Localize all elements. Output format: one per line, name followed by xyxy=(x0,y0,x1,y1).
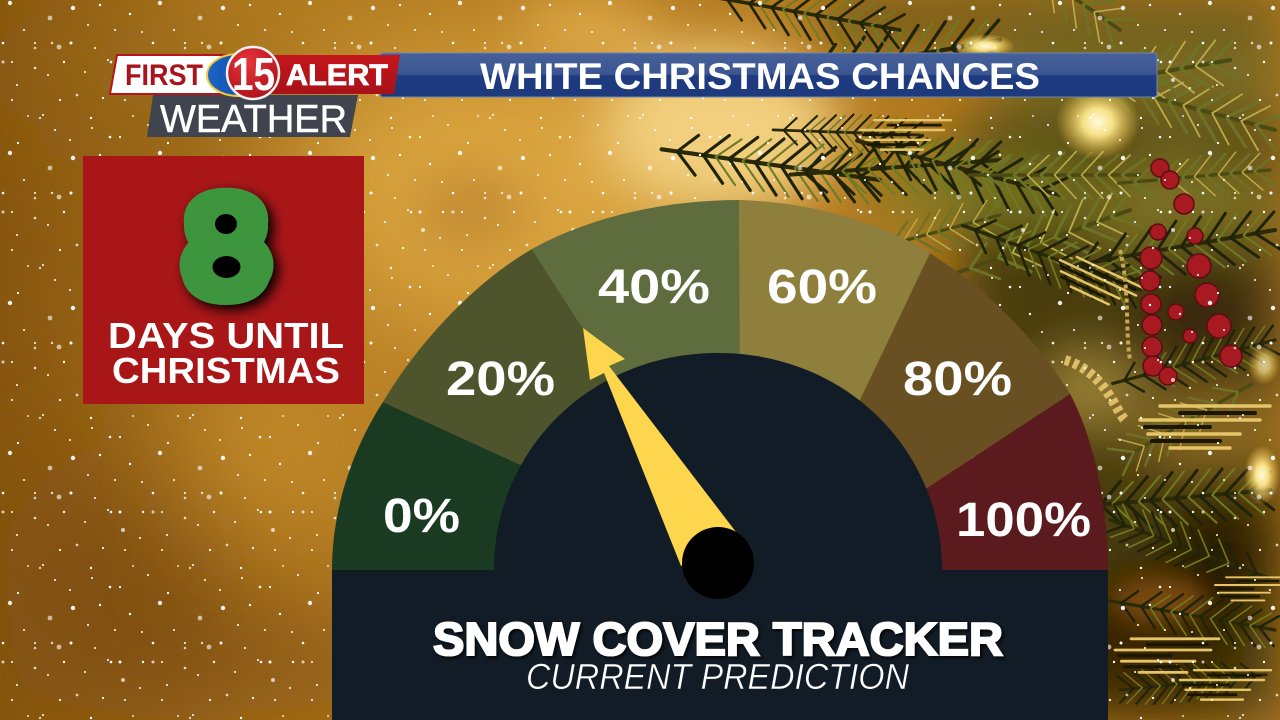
logo: 15 circle xyxy=(227,47,279,99)
background: christmas tree branches xyxy=(658,0,1280,720)
header: title bar xyxy=(380,53,1157,97)
label: 80%: 80% xyxy=(903,353,1012,406)
icons: red bead garland xyxy=(1140,159,1242,385)
gauge: snow cover tracker xyxy=(300,180,1130,720)
logo: First Alert 15 Weather xyxy=(110,47,400,141)
label: 60%: 60% xyxy=(767,261,877,314)
needle hub xyxy=(682,527,754,599)
segment: 0% xyxy=(332,402,521,570)
segment: 100% xyxy=(926,394,1108,570)
logo: blue swoosh xyxy=(207,54,269,96)
logo: first word: FIRST xyxy=(125,59,203,92)
logo: red alert plate xyxy=(236,55,400,94)
logo: 15 numerals: 15 xyxy=(232,48,275,100)
gauge base panel xyxy=(332,570,1108,720)
logo: white first plate xyxy=(110,55,240,94)
heading: snow cover tracker: SNOW COVER TRACKER xyxy=(433,613,1003,665)
segment: 80% xyxy=(860,253,1070,488)
segment: 60% xyxy=(739,200,930,400)
needle xyxy=(583,328,736,566)
logo: weather plate xyxy=(147,95,358,137)
label: 20%: 20% xyxy=(446,353,555,406)
title: WHITE CHRISTMAS CHANCES xyxy=(480,56,1040,97)
gauge inner dial xyxy=(494,353,942,570)
gauge segments xyxy=(332,200,1108,570)
big number 8: 8 xyxy=(182,162,270,330)
days until label: DAYS UNTIL xyxy=(108,315,344,356)
icons: tree lights xyxy=(955,34,1280,505)
segment: 40% xyxy=(532,200,740,376)
segment: 20% xyxy=(383,249,607,465)
label: 100%: 100% xyxy=(956,494,1091,547)
label: 40%: 40% xyxy=(598,261,710,314)
christmas label: CHRISTMAS xyxy=(112,350,340,391)
logo: weather word: WEATHER xyxy=(160,98,347,141)
panel: days until christmas xyxy=(83,156,364,404)
label: 0%: 0% xyxy=(383,490,460,543)
subheading: current prediction: CURRENT PREDICTION xyxy=(526,656,910,697)
logo: alert word: ALERT xyxy=(286,59,388,92)
